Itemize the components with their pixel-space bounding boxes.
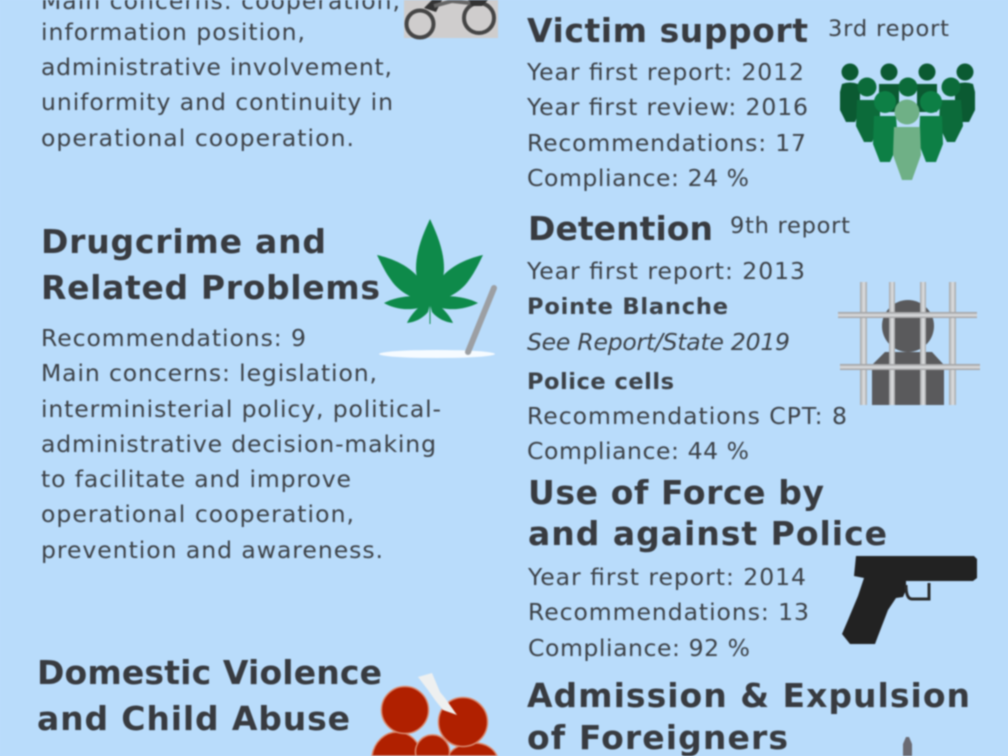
icon: partial figure at bottom edge [903, 737, 912, 756]
icon: group of people [840, 64, 975, 180]
icon: handgun [842, 556, 977, 644]
text block: drugcrime details [41, 324, 441, 564]
icon: cannabis leaf with powder and straw [377, 219, 495, 358]
heading: Victim support: Victim support [527, 11, 808, 50]
text block: cooperation main concerns: information position, [41, 18, 305, 46]
text block: drugcrime details: prevention and awareness. [41, 536, 383, 564]
text block: drugcrime details: Main concerns: legislation, [41, 359, 377, 387]
text block: victim support stats: Compliance: 24 % [527, 164, 749, 192]
text block: drugcrime details: Recommendations: 9 [41, 324, 306, 352]
label: 3rd report: 3rd report [828, 16, 949, 42]
heading: Admission & Expulsion of Foreigners [527, 676, 970, 756]
text block: use of force stats: Compliance: 92 % [528, 634, 750, 662]
text block: use of force stats: Year first report: 2014 [527, 563, 806, 591]
heading: Domestic Violence and Child Abuse [37, 653, 382, 738]
text block: victim support stats: Year first review: 2016 [526, 93, 808, 121]
text block: use of force stats [527, 563, 809, 662]
heading: Domestic Violence and Child Abuse: and Child Abuse [37, 699, 350, 738]
heading: Drugcrime and Related Problems: Related Problems [41, 268, 380, 307]
icon: family with lightning bolt [372, 673, 497, 756]
text block: cooperation main concerns: uniformity and continuity in [41, 88, 393, 116]
text block: detention stats: Compliance: 44 % [527, 437, 749, 465]
text block: detention stats: Pointe Blanche [527, 294, 728, 320]
icon: handcuffs [404, 0, 498, 38]
text block: drugcrime details: interministerial policy, political- [41, 395, 441, 423]
label: 9th report: 9th report [730, 213, 850, 239]
text block: detention stats: Year first report: 2013 [526, 257, 805, 285]
heading: Drugcrime and Related Problems: Drugcrime and [41, 222, 326, 261]
heading: Use of Force by and against Police: Use of Force by [528, 473, 824, 512]
text block: drugcrime details: to facilitate and improve [41, 465, 351, 493]
icon: prisoner behind bars [838, 282, 980, 405]
heading: Use of Force by and against Police: and against Police [528, 514, 887, 553]
heading: Admission & Expulsion of Foreigners: Admission & Expulsion [527, 676, 970, 715]
text block: detention stats [526, 257, 847, 465]
text block: use of force stats: Recommendations: 13 [528, 598, 809, 626]
text block: cooperation main concerns: operational cooperation. [41, 124, 354, 152]
heading: Drugcrime and Related Problems [41, 222, 380, 307]
text block: victim support stats: Year first report: 2012 [526, 58, 804, 86]
text block: victim support stats [526, 58, 808, 192]
text block: drugcrime details: administrative decision-making [41, 430, 436, 458]
text block: cooperation main concerns: administrative involvement, [41, 53, 392, 81]
heading: Use of Force by and against Police [528, 473, 887, 553]
heading: Domestic Violence and Child Abuse: Domestic Violence [37, 653, 382, 692]
text block: victim support stats: Recommendations: 17 [527, 129, 806, 157]
heading: Admission & Expulsion of Foreigners: of Foreigners [527, 718, 788, 756]
text block: detention stats: Police cells [527, 369, 674, 395]
heading: Detention: Detention [528, 209, 713, 248]
text block: cooperation main concerns [41, 0, 400, 152]
text block: detention stats: Recommendations CPT: 8 [527, 402, 847, 430]
text block: detention stats: See Report/State 2019 [527, 328, 790, 356]
text block: drugcrime details: operational cooperation, [41, 500, 354, 528]
